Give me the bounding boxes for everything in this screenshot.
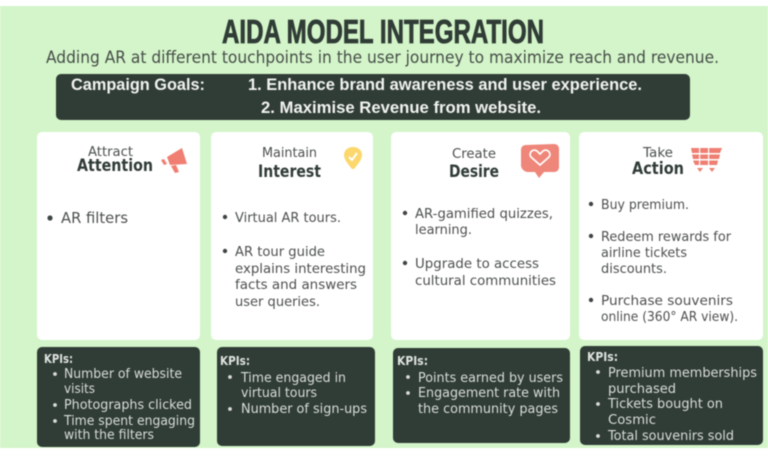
KPI list: Points earned by users: [418, 371, 563, 386]
bullet list: desire: cultural communities: [415, 273, 556, 289]
KPI list: Photographs clicked: [64, 398, 192, 413]
KPI list: Engagement rate with: [418, 386, 560, 401]
panel: attract attention: [37, 132, 200, 340]
goal 1: 1. Enhance brand awareness and user experience.: [248, 76, 642, 94]
title: AIDA MODEL INTEGRATION: [222, 13, 544, 50]
KPI list: purchased: [608, 382, 676, 397]
KPI list: Total souvenirs sold: [607, 429, 734, 444]
bullet list: action: online (360° AR view).: [601, 309, 738, 325]
heading: action: Action: [632, 159, 684, 178]
KPI list: Time engaged in: [240, 371, 346, 386]
panel: KPIs interest: [217, 347, 375, 446]
bullet list: interest: user queries.: [235, 294, 320, 310]
KPI list: [53, 367, 195, 443]
bullet list: action: Buy premium.: [601, 197, 689, 213]
panel: KPIs attention: [37, 347, 200, 447]
heading: interest: Interest: [258, 162, 321, 181]
KPI list: visits: [64, 382, 95, 397]
bullet list: interest: facts and answers: [235, 277, 357, 293]
KPI list: virtual tours: [241, 386, 317, 401]
icon: check pin: [344, 147, 362, 169]
KPI list: Premium memberships: [608, 366, 757, 381]
KPI list: Time spent engaging: [63, 414, 195, 429]
panel: KPIs desire: [393, 348, 570, 443]
heading: take: Take: [642, 146, 673, 161]
bullet list: action: Purchase souvenirs: [601, 293, 733, 309]
heading: desire: Desire: [449, 162, 499, 181]
KPI list: the community pages: [418, 402, 558, 417]
bullet list: desire: AR-gamified quizzes,: [415, 206, 553, 222]
heading: maintain: Maintain: [262, 146, 317, 161]
bullet list: action: discounts.: [601, 261, 667, 277]
goals label: Campaign Goals:: [71, 76, 205, 94]
KPI heading: KPIs:: [220, 353, 250, 368]
KPI heading: KPIs:: [397, 353, 428, 368]
panel: create desire: [391, 132, 570, 340]
bullet list: interest: explains interesting: [235, 261, 366, 277]
heading: attention: Attention: [77, 156, 153, 175]
KPI list: with the filters: [64, 428, 154, 443]
bullet list: action: [589, 197, 738, 325]
icon: megaphone: [161, 148, 187, 173]
KPI heading: KPIs:: [587, 349, 618, 364]
goal 2: 2. Maximise Revenue from website.: [261, 99, 541, 117]
KPI list: Number of sign-ups: [241, 402, 367, 417]
KPI list: Cosmic: [608, 413, 656, 428]
icon: shopping cart: [691, 148, 722, 172]
panel: campaign goals: [56, 74, 690, 120]
panel: maintain interest: [211, 132, 373, 340]
bullet list: desire: [403, 206, 556, 289]
bullet list: desire: Upgrade to access: [415, 256, 539, 272]
KPI list: [406, 371, 563, 417]
bullet list: action: Redeem rewards for: [601, 229, 731, 245]
bullet list: interest: Virtual AR tours.: [235, 210, 341, 226]
panel: take action: [579, 132, 763, 340]
KPI list: [596, 366, 757, 444]
KPI list: Tickets bought on: [607, 397, 723, 412]
panel: KPIs action: [580, 346, 763, 445]
KPI heading: KPIs:: [44, 351, 73, 366]
heading: attract: Attract: [88, 145, 133, 160]
KPI list: Number of website: [64, 367, 182, 382]
bullet list: action: airline tickets: [601, 245, 687, 261]
bullet list: interest: [223, 210, 366, 310]
bullet list: interest: AR tour guide: [235, 244, 325, 260]
KPI list: [228, 371, 367, 417]
subtitle: Adding AR at different touchpoints in the user journey to maximize reach and revenue.: [46, 48, 719, 67]
bullet list: desire: learning.: [415, 222, 472, 238]
heading: create: Create: [452, 147, 496, 162]
icon: heart speech bubble: [521, 144, 559, 178]
bullet list: attention: AR filters: [61, 209, 128, 227]
